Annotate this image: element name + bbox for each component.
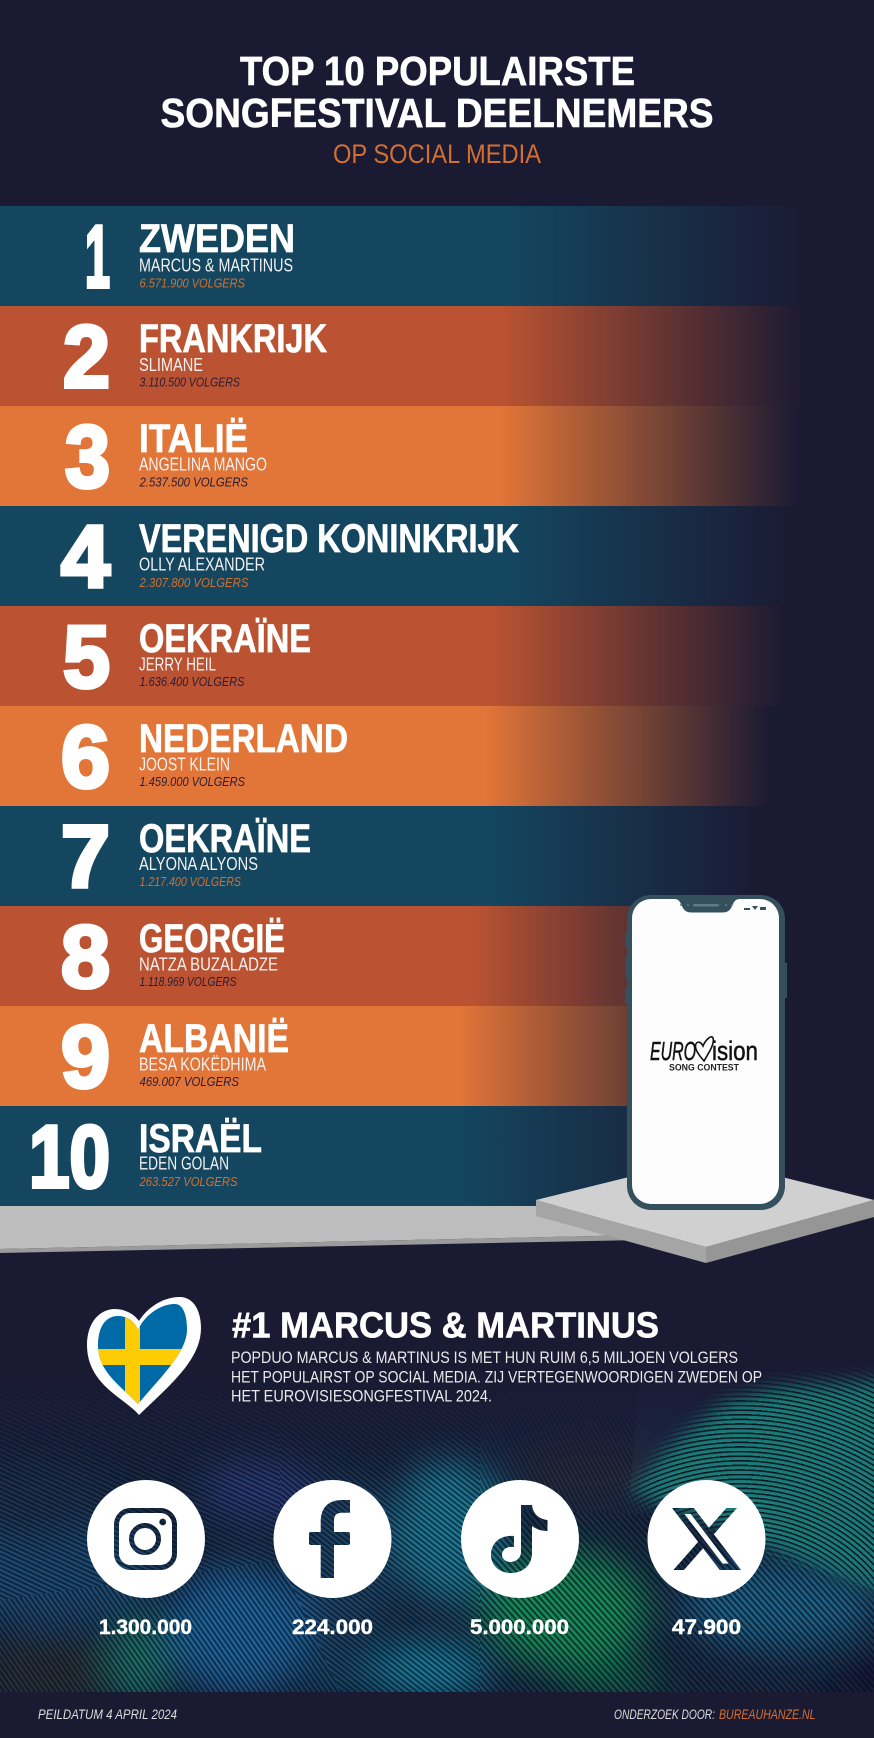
Eurovision logo: SONG CONTEST xyxy=(669,1062,739,1074)
teal feather rings xyxy=(626,1370,874,1600)
row 10: Israël: ISRAËL xyxy=(139,1117,262,1161)
notch xyxy=(674,899,740,912)
footer band xyxy=(0,1692,874,1738)
row 4: Verenigd Koninkrijk: OLLY ALEXANDER xyxy=(139,554,265,574)
row 10: Israël: 263.527 VOLGERS xyxy=(139,1174,238,1189)
row 3: Italië: 3 xyxy=(65,407,110,506)
Eurovision logo xyxy=(650,1036,758,1074)
icon: Swedish flag heart xyxy=(87,1297,201,1415)
row 3: Italië: 2.537.500 VOLGERS xyxy=(139,474,248,490)
row 6: Nederland: 1.459.000 VOLGERS xyxy=(140,774,245,789)
row 5: Oekraïne: OEKRAÏNE xyxy=(139,617,311,661)
subtitle: OP SOCIAL MEDIA xyxy=(333,139,541,169)
row 10: Israël: EDEN GOLAN xyxy=(139,1154,229,1174)
row 1: Zweden: MARCUS & MARTINUS xyxy=(139,256,293,276)
row 2: Frankrijk: SLIMANE xyxy=(139,355,203,375)
row 8: Georgië xyxy=(0,906,874,1006)
phone xyxy=(625,895,787,1210)
Eurovision logo: ision xyxy=(712,1036,758,1066)
row 5: Oekraïne: 1.636.400 VOLGERS xyxy=(140,674,245,689)
row 1: Zweden: ZWEDEN xyxy=(139,217,295,261)
row 8: Georgië: GEORGIË xyxy=(139,917,285,961)
follower counts per platform: 47.900 xyxy=(672,1616,741,1639)
row 9: Albanië: 9 xyxy=(61,1007,110,1106)
row 6: Nederland: 6 xyxy=(61,707,110,806)
follower counts per platform: 5.000.000 xyxy=(470,1616,569,1639)
row 9: Albanië xyxy=(0,1006,874,1106)
footer: date: PEILDATUM 4 APRIL 2024 xyxy=(38,1706,177,1722)
title: SONGFESTIVAL DEELNEMERS xyxy=(160,90,714,136)
row 7: Oekraïne: 7 xyxy=(61,807,110,906)
row 4: Verenigd Koninkrijk: VERENIGD KONINKRIJK xyxy=(139,517,519,561)
row 9: Albanië: BESA KOKËDHIMA xyxy=(139,1054,266,1074)
row 8: Georgië: 8 xyxy=(61,907,110,1006)
row 2: Frankrijk: FRANKRIJK xyxy=(139,317,327,361)
footer: research credit: BUREAUHANZE.NL xyxy=(719,1706,816,1722)
row 4: Verenigd Koninkrijk xyxy=(0,506,874,606)
row 3: Italië xyxy=(0,406,874,506)
row 2: Frankrijk xyxy=(0,306,874,406)
heading: #1 Marcus & Martinus: #1 MARCUS & MARTINUS xyxy=(232,1304,659,1346)
row 7: Oekraïne xyxy=(0,806,874,906)
title xyxy=(160,48,714,136)
title: TOP 10 POPULAIRSTE xyxy=(240,48,635,94)
row 6: Nederland: JOOST KLEIN xyxy=(139,754,230,774)
row 5: Oekraïne xyxy=(0,606,874,706)
side buttons xyxy=(625,933,787,1004)
phone platform xyxy=(536,1158,874,1263)
row 5: Oekraïne: 5 xyxy=(63,607,110,706)
row 3: Italië: ANGELINA MANGO xyxy=(139,454,267,474)
row 4: Verenigd Koninkrijk: 4 xyxy=(61,507,110,606)
status icons xyxy=(744,906,766,910)
body text: POPDUO MARCUS & MARTINUS IS MET HUN RUIM 6,5 MILJOEN VOLGERS xyxy=(231,1349,738,1367)
row 10: Israël xyxy=(0,1106,874,1206)
row 2: Frankrijk: 2 xyxy=(63,307,110,406)
Eurovision logo: EURO xyxy=(650,1036,696,1066)
row 2: Frankrijk: 3.110.500 VOLGERS xyxy=(140,374,240,390)
row 4: Verenigd Koninkrijk: 2.307.800 VOLGERS xyxy=(139,575,249,590)
footer: research credit xyxy=(614,1706,816,1722)
follower counts per platform: 224.000 xyxy=(292,1616,373,1639)
row 9: Albanië: 469.007 VOLGERS xyxy=(140,1074,239,1089)
row 7: Oekraïne: ALYONA ALYONS xyxy=(139,854,258,874)
row 10: Israël: 10 xyxy=(29,1107,110,1206)
row 6: Nederland: NEDERLAND xyxy=(139,717,348,761)
row 6: Nederland xyxy=(0,706,874,806)
row 9: Albanië: ALBANIË xyxy=(139,1017,289,1061)
social media circles with cut-out icons xyxy=(87,1480,766,1598)
body text: HET EUROVISIESONGFESTIVAL 2024. xyxy=(231,1388,492,1406)
feather background image xyxy=(0,1370,874,1692)
row 8: Georgië: NATZA BUZALADZE xyxy=(139,954,278,974)
follower counts per platform: 1.300.000 xyxy=(99,1616,192,1639)
row 5: Oekraïne: JERRY HEIL xyxy=(139,654,216,674)
row 7: Oekraïne: OEKRAÏNE xyxy=(139,817,311,861)
body text xyxy=(231,1349,762,1406)
row 3: Italië: ITALIË xyxy=(139,417,248,461)
row 1: Zweden: 1 xyxy=(85,207,110,306)
row 1: Zweden xyxy=(0,206,874,306)
row 1: Zweden: 6.571.900 VOLGERS xyxy=(140,276,245,290)
row 7: Oekraïne: 1.217.400 VOLGERS xyxy=(140,874,241,889)
footer: research credit: ONDERZOEK DOOR: xyxy=(614,1706,715,1722)
row 8: Georgië: 1.118.969 VOLGERS xyxy=(140,974,237,989)
follower counts per platform xyxy=(99,1616,741,1639)
body text: HET POPULAIRST OP SOCIAL MEDIA. ZIJ VERTEGENWOORDIGEN ZWEDEN OP xyxy=(231,1368,762,1386)
shelf under the rows xyxy=(0,1206,640,1253)
